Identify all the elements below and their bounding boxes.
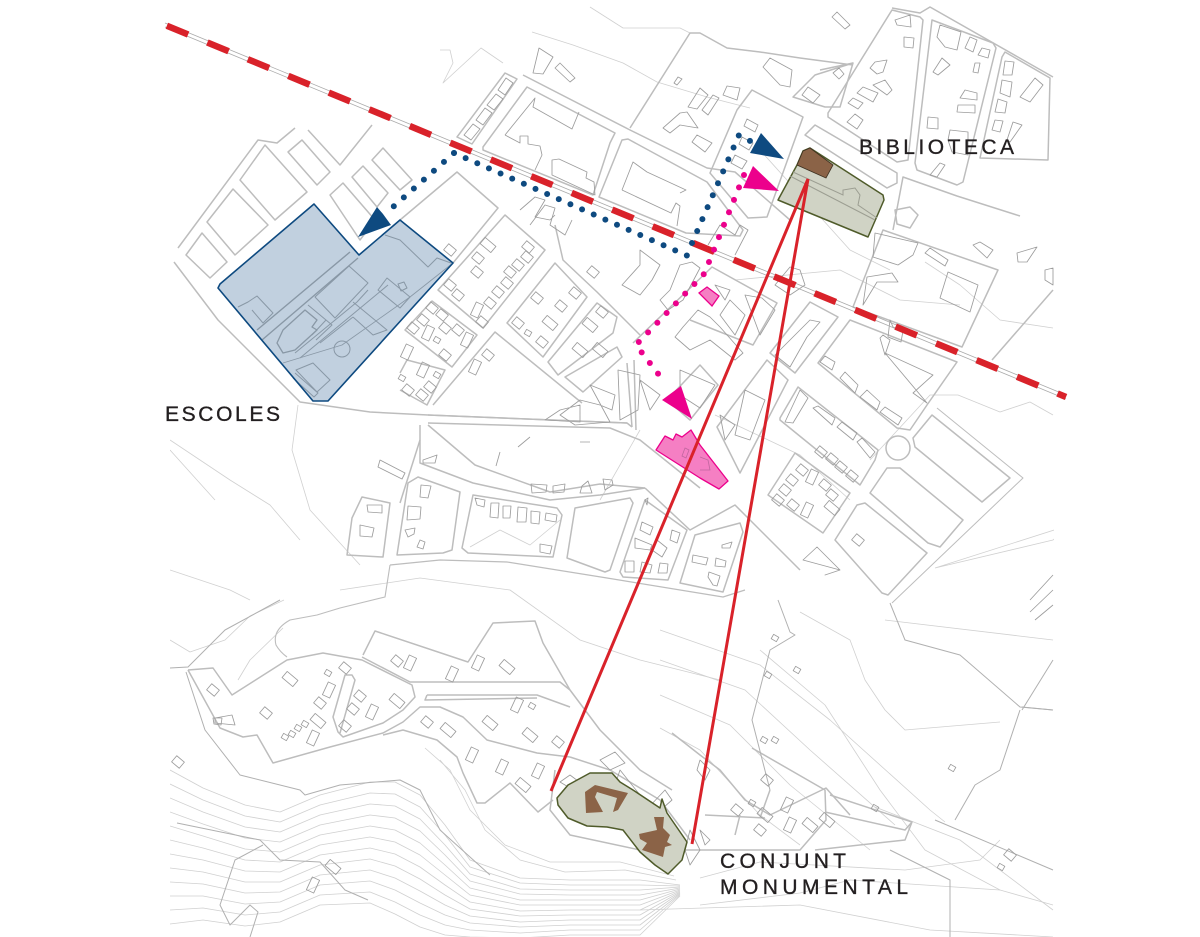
label: conjunt monumental: MONUMENTAL bbox=[720, 876, 908, 899]
pink destination buildings bbox=[656, 287, 728, 489]
contour lines bbox=[170, 7, 1070, 937]
map infographic bbox=[164, 6, 1068, 937]
buildings bbox=[172, 12, 1053, 893]
pink route bbox=[636, 166, 779, 419]
thin paths bbox=[170, 600, 1053, 937]
blue route to escoles bbox=[358, 153, 454, 237]
blue route to biblioteca bbox=[454, 133, 784, 256]
label: escoles: ESCOLES bbox=[165, 403, 280, 426]
label: conjunt monumental: CONJUNT bbox=[720, 850, 846, 873]
base map bbox=[170, 7, 1070, 937]
label: conjunt monumental bbox=[720, 850, 908, 899]
panel: biblioteca site bbox=[778, 148, 884, 237]
visual link red lines bbox=[551, 179, 808, 844]
panel: conjunt monumental site bbox=[557, 773, 687, 874]
label: biblioteca: BIBLIOTECA bbox=[859, 136, 1014, 159]
railway line bbox=[165, 23, 1066, 399]
roads and urban blocks bbox=[174, 7, 1053, 850]
panel: escoles site bbox=[218, 204, 453, 401]
